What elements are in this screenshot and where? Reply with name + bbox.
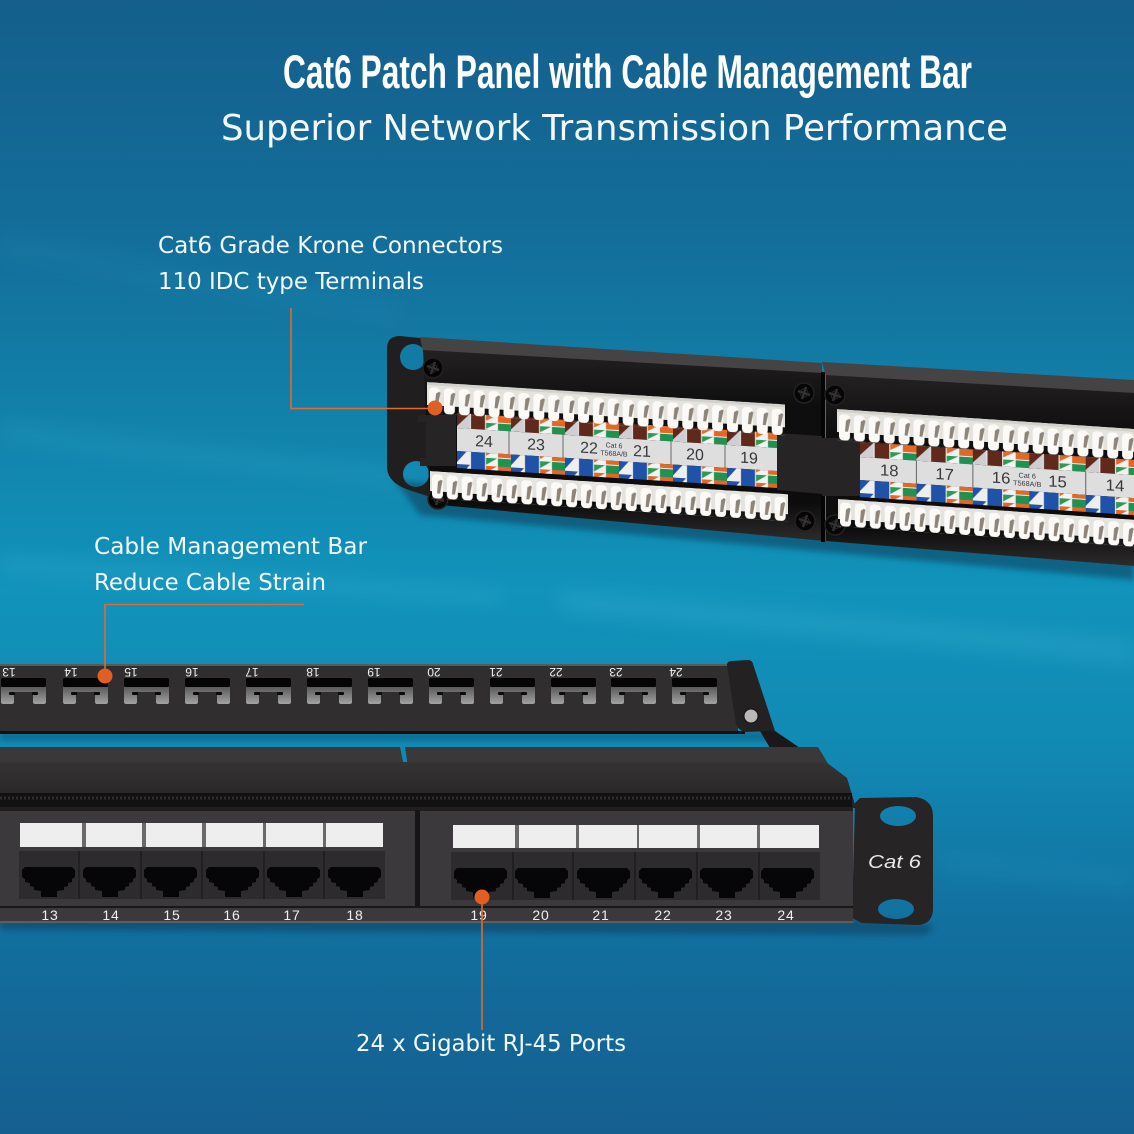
rear panel left mounting ear <box>387 336 440 500</box>
port numbers: 20 <box>532 907 550 923</box>
right terminal block wiring and labels: 18 <box>880 462 899 480</box>
right terminal block wiring and labels: T568A/B <box>1013 479 1042 489</box>
cable bar upside-down numbers: 23 <box>609 665 623 679</box>
port numbers: 14 <box>102 907 120 923</box>
callout: Krone connectors <box>158 233 503 416</box>
left terminal block wiring and labels: 21 <box>633 443 651 461</box>
lower white terminal strip, left block <box>430 471 788 521</box>
cable bar upside-down numbers: 22 <box>549 665 563 679</box>
port numbers: 17 <box>283 907 301 923</box>
right terminal block wiring and labels: 14 <box>1106 477 1124 495</box>
right terminal block wiring and labels: 17 <box>935 465 954 484</box>
left terminal block wiring and labels: T568A/B <box>600 450 628 459</box>
side latches <box>418 415 860 496</box>
front faceplate <box>0 807 853 923</box>
cable bar upside-down numbers: 14 <box>64 665 78 679</box>
port numbers: 18 <box>346 907 364 923</box>
right RJ-45 port modules <box>451 852 820 900</box>
cable bar upside-down numbers: 19 <box>367 665 381 679</box>
cable bar upside-down numbers: 18 <box>306 665 320 679</box>
panel lid and hood <box>0 747 856 808</box>
cable bar upside-down numbers: 20 <box>427 665 441 679</box>
left terminal block wiring and labels: 23 <box>527 436 545 454</box>
leader dot: connectors <box>428 400 442 416</box>
callout text: ports: 24 x Gigabit RJ-45 Ports <box>356 1031 626 1057</box>
callout text: terminals: 110 IDC type Terminals <box>158 269 424 295</box>
right terminal block wiring and labels: Cat 6 <box>1018 472 1036 481</box>
port numbers: 13 <box>41 907 59 923</box>
callout: cable management bar <box>94 534 368 684</box>
left terminal block wiring and labels: 24 <box>475 433 493 451</box>
port numbers: 23 <box>715 907 733 923</box>
port numbers: 21 <box>592 907 610 923</box>
panel screws <box>423 358 845 535</box>
left terminal block wiring and labels <box>457 413 777 488</box>
left terminal block wiring and labels: 22 <box>580 440 598 458</box>
left terminal block wiring and labels: 20 <box>686 446 704 464</box>
rear panel shadow <box>395 480 1134 580</box>
front panel shadow <box>0 918 935 935</box>
cable bar upside-down numbers: 17 <box>245 665 259 679</box>
cable bar upside-down numbers: 16 <box>185 665 199 679</box>
ear Cat 6 mark: Cat 6 <box>868 852 922 872</box>
port numbers <box>41 907 795 923</box>
port numbers: 16 <box>223 907 241 923</box>
right terminal block wiring and labels: 16 <box>992 469 1010 488</box>
front patch panel photo <box>0 660 935 935</box>
left RJ-45 port modules <box>19 851 385 899</box>
right mounting ear <box>852 797 933 925</box>
cable bar upside-down numbers: 15 <box>124 665 138 679</box>
right terminal block wiring and labels <box>860 442 1134 516</box>
callout text: strain: Reduce Cable Strain <box>94 570 326 596</box>
cable bar upside-down numbers: 24 <box>669 665 683 679</box>
leader dot: ports <box>474 890 490 904</box>
cable bar shadow <box>0 733 770 740</box>
cable bar upside-down numbers: 21 <box>489 665 503 679</box>
callout text: connectors: Cat6 Grade Krone Connectors <box>158 233 503 259</box>
leader dot: cable bar <box>98 668 112 684</box>
upper white terminal strip, right block <box>837 409 1134 460</box>
port numbers: 19 <box>470 907 488 923</box>
cable bar upside-down numbers <box>2 665 683 679</box>
lower white terminal strip, right block <box>838 499 1134 547</box>
leader line: cable bar <box>105 604 304 676</box>
right terminal block wiring and labels: 15 <box>1048 473 1067 492</box>
cable bar slots <box>1 678 717 704</box>
port numbers: 15 <box>163 907 181 923</box>
rear panel chassis left section <box>420 337 824 541</box>
leader line: ports <box>481 897 483 1030</box>
left terminal block wiring and labels: Cat 6 <box>606 442 622 450</box>
cable bar upside-down numbers: 13 <box>2 665 16 679</box>
cable bar end bracket <box>727 660 800 748</box>
cable management bar <box>0 660 800 748</box>
right white label strip <box>453 825 819 848</box>
callout text: cable bar: Cable Management Bar <box>94 534 368 560</box>
rear panel chassis right section <box>821 362 1134 566</box>
rear patch panel photo <box>387 336 1134 580</box>
upper white terminal strip, left block <box>427 382 785 435</box>
port numbers: 22 <box>654 907 672 923</box>
port numbers: 24 <box>777 907 795 923</box>
callout: RJ-45 ports <box>356 890 626 1057</box>
subtitle: Superior Network Transmission Performance <box>221 108 1008 149</box>
left white label strip <box>20 823 383 847</box>
left terminal block wiring and labels: 19 <box>740 450 758 468</box>
leader line: connectors <box>291 308 435 408</box>
